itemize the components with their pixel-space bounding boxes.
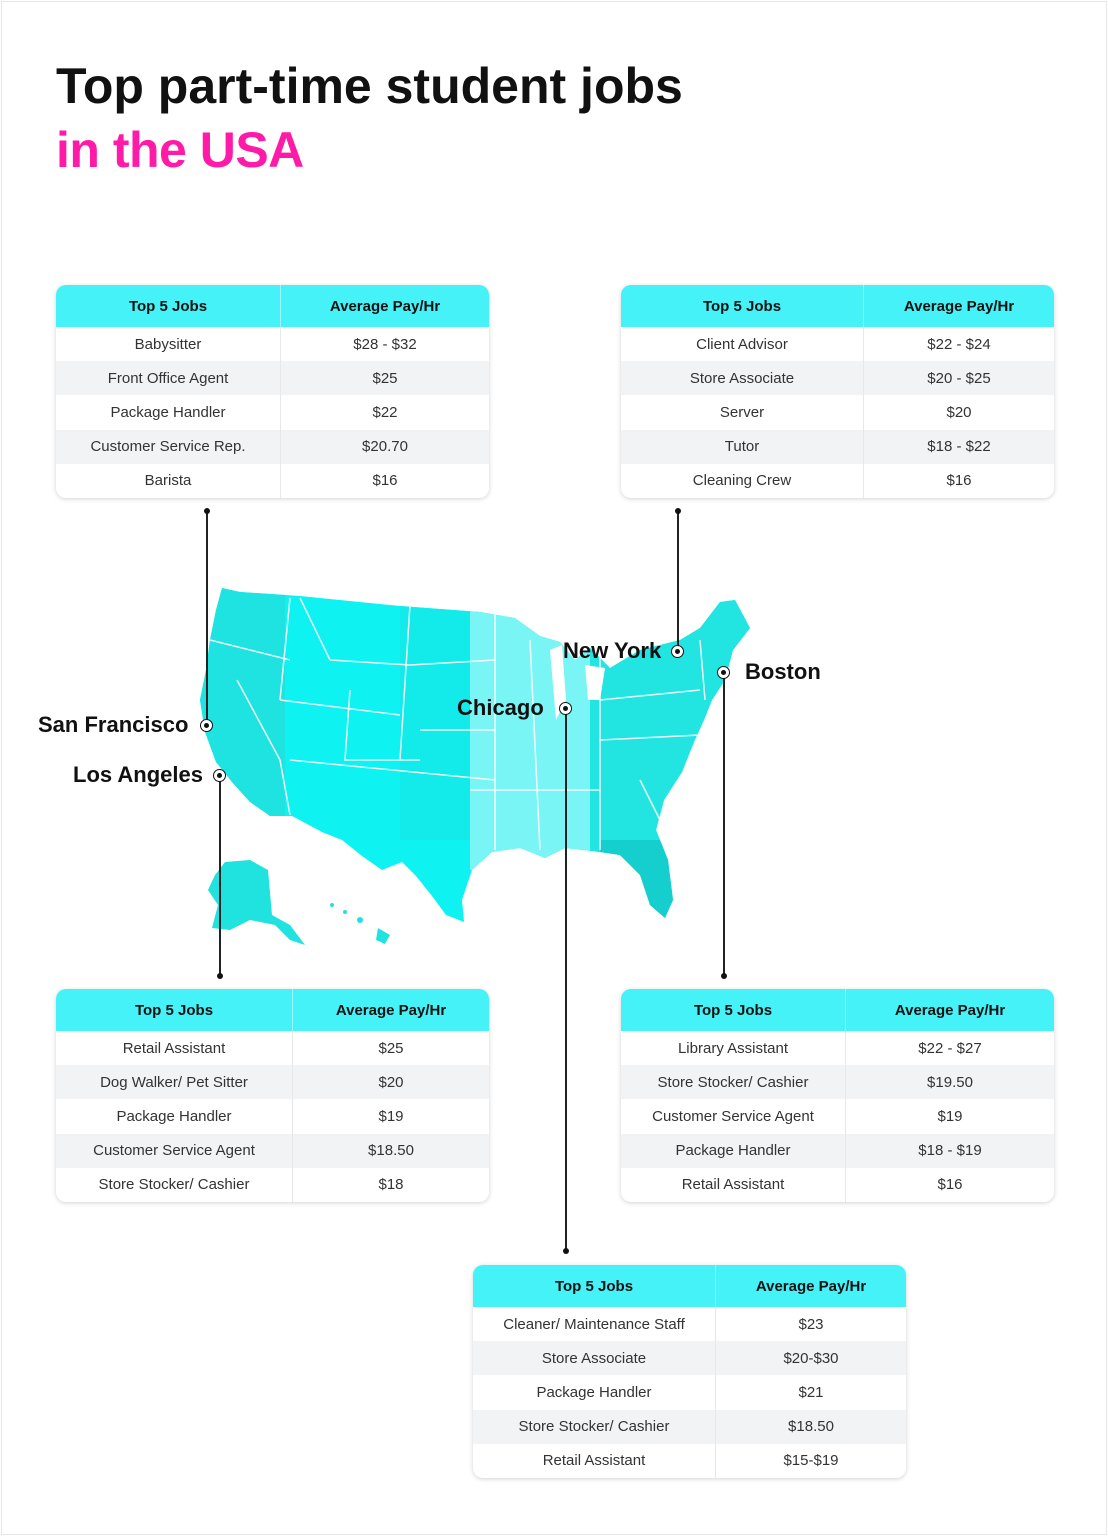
table: San Francisco: $16: [372, 472, 398, 489]
table: San Francisco: [56, 285, 489, 498]
table: Los Angeles: $25: [378, 1040, 404, 1057]
connector line: New York: [677, 511, 678, 651]
table: Chicago: Retail Assistant: [543, 1452, 645, 1469]
title: [56, 58, 683, 178]
table: Boston: Average Pay/Hr: [895, 1002, 1005, 1018]
table: Boston: $19.50: [927, 1074, 973, 1091]
map of USA: [200, 588, 750, 945]
table: San Francisco: Barista: [145, 472, 191, 489]
table: San Francisco: $28 - $32: [353, 336, 417, 353]
table: Boston: Top 5 Jobs: [694, 1002, 772, 1018]
table: New York: Top 5 Jobs: [703, 298, 781, 314]
table: New York: $16: [946, 472, 972, 489]
table: Los Angeles: $20: [378, 1074, 404, 1091]
table: San Francisco: $22: [372, 404, 398, 421]
table: Boston: $16: [937, 1176, 963, 1193]
connector line: San Francisco: [206, 511, 208, 725]
city label: Boston: Boston: [745, 659, 821, 684]
table: Chicago: $21: [798, 1384, 824, 1401]
table: New York: Server: [720, 404, 764, 421]
table: Boston: Library Assistant: [678, 1040, 788, 1057]
table: Boston: Package Handler: [675, 1142, 791, 1159]
city label: Los Angeles: Los Angeles: [73, 762, 203, 787]
table: Chicago: Cleaner/ Maintenance Staff: [503, 1316, 685, 1333]
table: Los Angeles: $18: [378, 1176, 404, 1193]
table: New York: Cleaning Crew: [693, 472, 791, 489]
table: New York: Average Pay/Hr: [904, 298, 1014, 314]
table: Boston: Customer Service Agent: [652, 1108, 814, 1125]
table: Chicago: Average Pay/Hr: [756, 1278, 866, 1294]
table: San Francisco: Babysitter: [135, 336, 201, 353]
table: Chicago: Package Handler: [536, 1384, 652, 1401]
table: New York: $20: [946, 404, 972, 421]
table: Boston: Retail Assistant: [682, 1176, 784, 1193]
table: Chicago: [473, 1265, 906, 1478]
table: Boston: $22 - $27: [918, 1040, 982, 1057]
table: Los Angeles: $19: [378, 1108, 404, 1125]
city label: San Francisco: San Francisco: [38, 712, 188, 737]
table: New York: $18 - $22: [927, 438, 991, 455]
table: Los Angeles: [56, 989, 489, 1202]
table: Chicago: Store Associate: [542, 1350, 646, 1367]
pin: Boston: [717, 666, 730, 679]
city label: Chicago: Chicago: [457, 695, 544, 720]
pin: Los Angeles: [213, 769, 226, 782]
pin: Chicago: [559, 702, 572, 715]
table: San Francisco: $20.70: [362, 438, 408, 455]
title: Top part-time student jobs: [56, 58, 683, 114]
table: New York: $20 - $25: [927, 370, 991, 387]
table: Chicago: $23: [798, 1316, 824, 1333]
pin: San Francisco: [200, 719, 213, 732]
table: Boston: $19: [937, 1108, 963, 1125]
city label: New York: New York: [563, 638, 661, 663]
table: Chicago: $20-$30: [783, 1350, 839, 1367]
table: Chicago: Store Stocker/ Cashier: [519, 1418, 669, 1435]
table: Boston: Store Stocker/ Cashier: [658, 1074, 808, 1091]
pin: New York: [671, 645, 684, 658]
table: San Francisco: Front Office Agent: [108, 370, 228, 387]
table: Los Angeles: Store Stocker/ Cashier: [99, 1176, 249, 1193]
connector line: Boston: [723, 672, 724, 976]
table: New York: $22 - $24: [927, 336, 991, 353]
table: New York: Client Advisor: [696, 336, 788, 353]
table: Los Angeles: Package Handler: [116, 1108, 232, 1125]
table: Los Angeles: Top 5 Jobs: [135, 1002, 213, 1018]
table: Boston: [621, 989, 1054, 1202]
title: in the USA: [56, 122, 304, 178]
table: Los Angeles: Dog Walker/ Pet Sitter: [100, 1074, 248, 1091]
table: Chicago: $18.50: [788, 1418, 834, 1435]
table: Los Angeles: Average Pay/Hr: [336, 1002, 446, 1018]
table: San Francisco: Top 5 Jobs: [129, 298, 207, 314]
table: New York: Tutor: [725, 438, 759, 455]
connector line: Los Angeles: [219, 775, 220, 976]
table: Los Angeles: Customer Service Agent: [93, 1142, 255, 1159]
table: Los Angeles: Retail Assistant: [123, 1040, 225, 1057]
table: San Francisco: Package Handler: [110, 404, 226, 421]
table: Los Angeles: $18.50: [368, 1142, 414, 1159]
table: Chicago: $15-$19: [783, 1452, 839, 1469]
table: New York: Store Associate: [690, 370, 794, 387]
table: Chicago: Top 5 Jobs: [555, 1278, 633, 1294]
table: New York: [621, 285, 1054, 498]
table: San Francisco: Average Pay/Hr: [330, 298, 440, 314]
table: San Francisco: Customer Service Rep.: [90, 438, 246, 455]
connector line: Chicago: [565, 708, 566, 1251]
table: Boston: $18 - $19: [918, 1142, 982, 1159]
table: San Francisco: $25: [372, 370, 398, 387]
